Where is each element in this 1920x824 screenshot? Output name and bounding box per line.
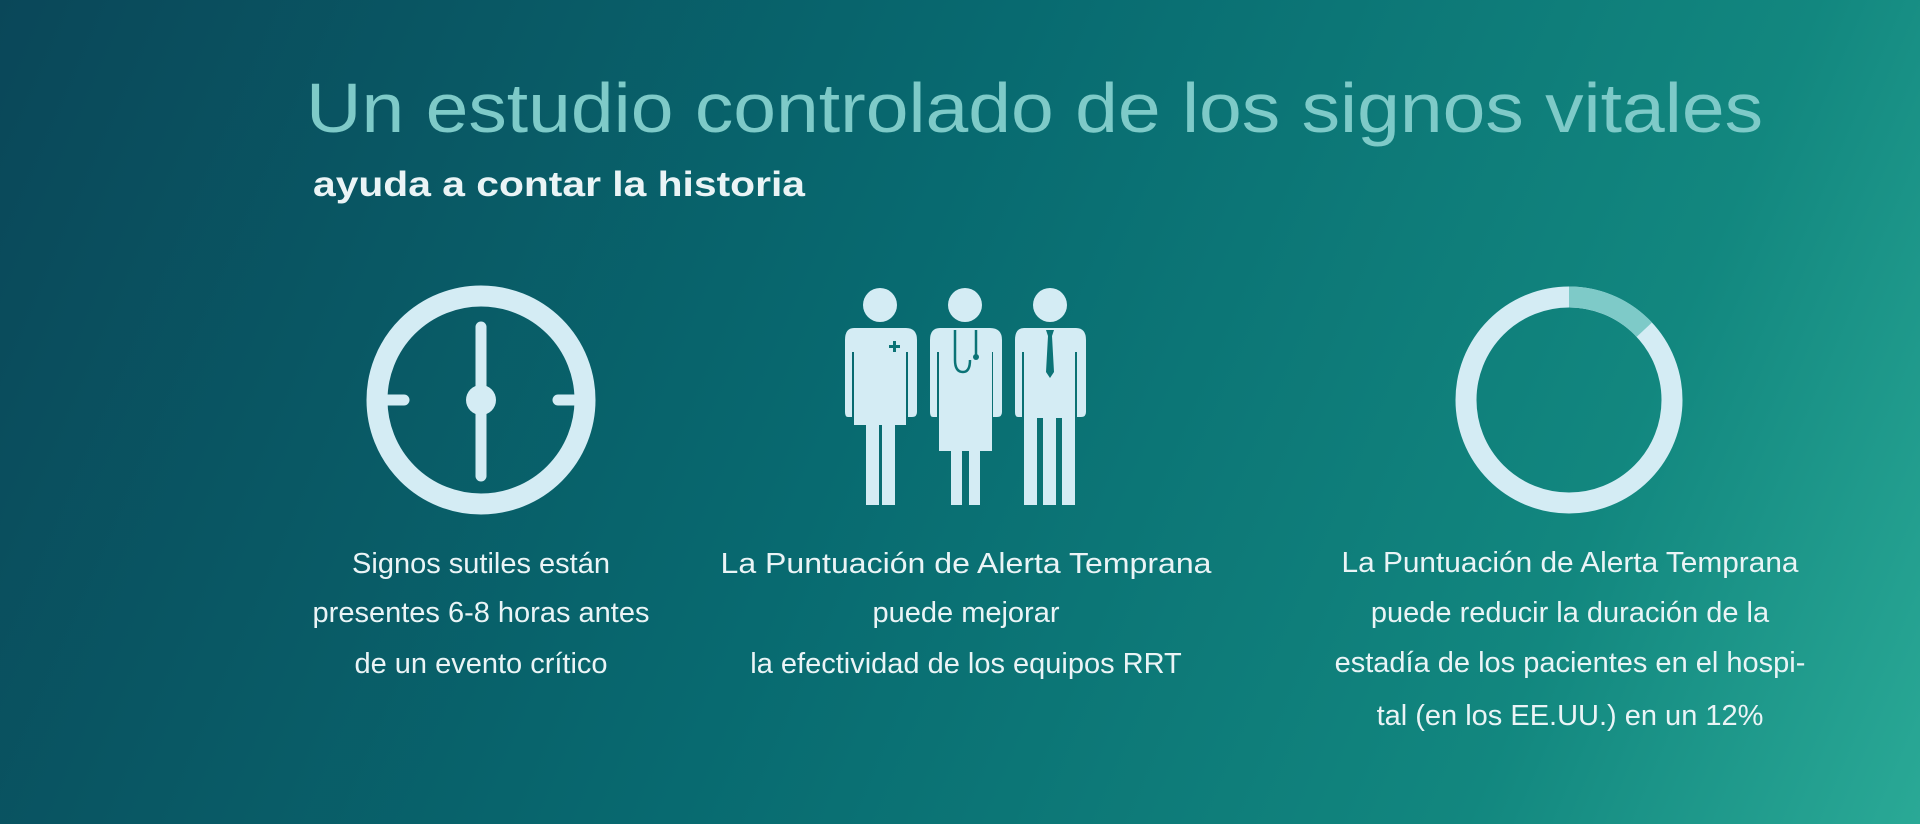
text: column 1: de un evento crítico xyxy=(354,648,608,680)
text: column 3: tal (en los EE.UU.) en un 12% xyxy=(1377,700,1763,732)
text: column 3: La Puntuación de Alerta Temprana xyxy=(1342,547,1799,579)
text: column 3: estadía de los pacientes en el hospi- xyxy=(1335,647,1805,679)
text: column 2: la efectividad de los equipos RRT xyxy=(750,648,1182,680)
text: column 1 xyxy=(313,548,649,680)
icon: nurse xyxy=(845,288,917,505)
icon: medical staff xyxy=(845,288,1086,505)
icon: donut 12% xyxy=(1466,297,1672,503)
text: column 1: Signos sutiles están xyxy=(352,548,610,580)
text: column 2: puede mejorar xyxy=(872,597,1060,629)
icon: clock xyxy=(377,296,585,504)
icon: doctor xyxy=(930,288,1002,505)
text: column 2: La Puntuación de Alerta Temprana xyxy=(720,548,1212,580)
text: column 1: presentes 6-8 horas antes xyxy=(313,597,649,629)
text: column 3: puede reducir la duración de la xyxy=(1371,597,1770,629)
text: column 2 xyxy=(720,548,1212,680)
title: Un estudio controlado de los signos vitales xyxy=(306,69,1763,147)
text: column 3 xyxy=(1335,547,1805,732)
icon: man with tie xyxy=(1015,288,1086,505)
subtitle: ayuda a contar la historia xyxy=(313,165,806,204)
